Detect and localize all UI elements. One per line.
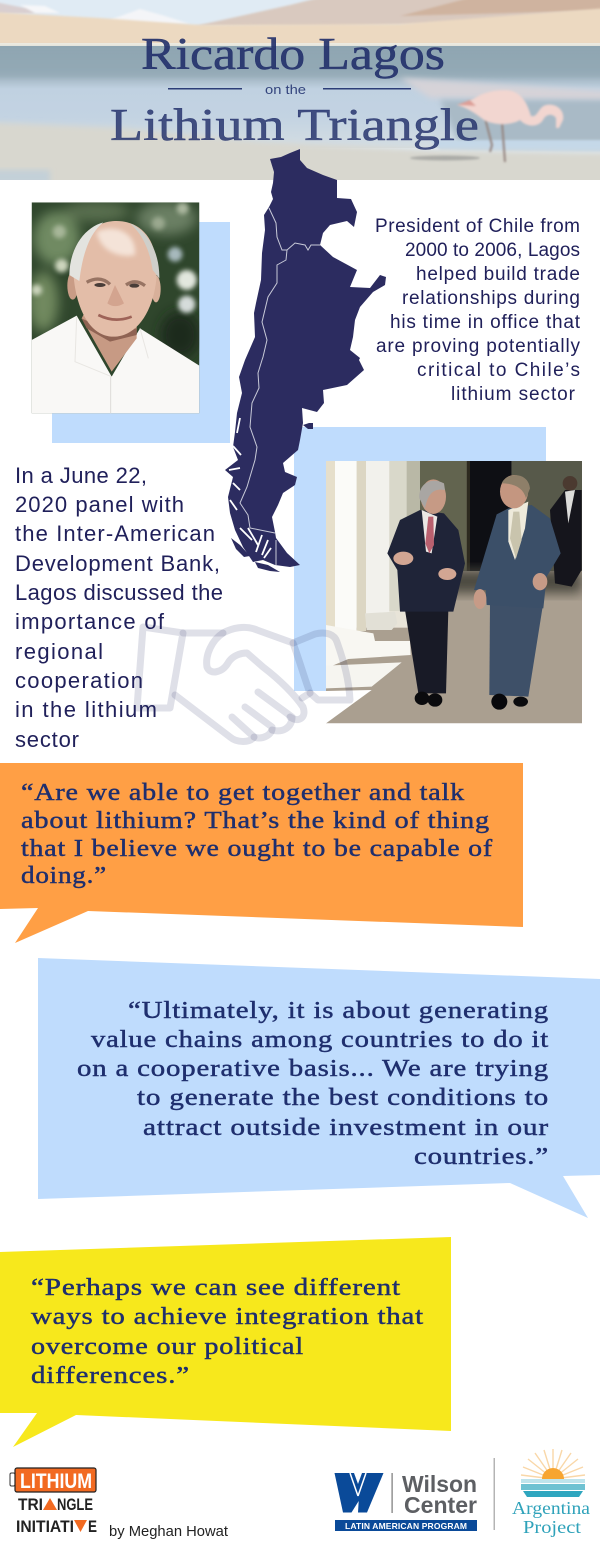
neck (82, 308, 137, 372)
text block: Lagos biography: his time in office that (390, 312, 581, 333)
foreground salt flat (0, 122, 600, 180)
text block: June 22 panel: 2020 panel with (15, 492, 184, 517)
callout: orange quote: that I believe we ought to be capable of (21, 835, 493, 862)
divider between logos (494, 1458, 495, 1530)
logo: Wilson Center: Center (404, 1492, 477, 1518)
logo: Lithium Triangle Initiative (10, 1468, 97, 1536)
callout: yellow quote: differences.” (31, 1362, 190, 1389)
callout: blue quote: value chains among countries to do it (91, 1026, 549, 1053)
callout: blue quote: “Ultimately, it is about generating (128, 997, 549, 1024)
callout: orange quote: doing.” (21, 862, 107, 889)
callout: yellow quote: overcome our political (31, 1333, 304, 1360)
distant snow mountains (0, 0, 600, 26)
logo: Lithium Triangle Initiative: INITIATI (16, 1517, 74, 1536)
text block: June 22 panel: Development Bank, (15, 551, 220, 576)
callout: blue quote: on a cooperative basis... We are trying (77, 1055, 549, 1082)
logo: Lithium Triangle Initiative: TRI (18, 1495, 43, 1514)
callout: blue quote: to generate the best conditions to (137, 1084, 549, 1111)
shirt (32, 316, 199, 413)
callout: blue quote: countries.” (414, 1143, 549, 1170)
background aide (550, 490, 582, 587)
Lagos (405, 610, 448, 693)
text block: June 22 panel: Lagos discussed the (15, 580, 223, 605)
icon: handshake watermark (137, 627, 350, 742)
lit floor patches (326, 625, 411, 668)
title: Lithium Triangle: Lithium Triangle (110, 100, 479, 150)
callout: blue quote: attract outside investment in our (143, 1114, 549, 1141)
text block: Lagos biography: lithium sector (451, 384, 576, 405)
text block: June 22 panel (15, 463, 223, 752)
fjords of southern Chile (229, 418, 271, 558)
water (0, 46, 600, 148)
Bush (489, 603, 543, 697)
text block: June 22 panel: In a June 22, (15, 463, 147, 488)
text block: Lagos biography: relationships during (402, 288, 580, 309)
text block: Lagos biography: 2000 to 2006, Lagos (405, 240, 580, 261)
text block: June 22 panel: cooperation (15, 668, 143, 693)
text block: June 22 panel: sector (15, 727, 79, 752)
southern islands (231, 538, 250, 557)
callout: orange quote (0, 763, 523, 943)
logo: Argentina Project: Argentina (512, 1498, 590, 1518)
logo: Argentina Project: Project (523, 1517, 581, 1537)
logo: Argentina Project (512, 1449, 590, 1537)
logo: Lithium Triangle Initiative: E (88, 1517, 97, 1536)
text block: June 22 panel: regional (15, 639, 103, 664)
header banner photo: salt lake with flamingo (0, 0, 600, 190)
text block: Lagos biography: are proving potentially (376, 336, 580, 357)
ears (67, 272, 78, 300)
text block: Lagos biography: helped build trade (416, 264, 580, 285)
callout: orange quote: about lithium? That’s the kind of thing (21, 807, 490, 834)
panel: blue backing for portrait (52, 222, 230, 443)
photo: Lagos and Bush walking (326, 461, 582, 723)
callout: orange quote: “Are we able to get together and talk (21, 779, 465, 806)
portrait photo of Ricardo Lagos (28, 202, 200, 413)
sand bank (0, 8, 600, 43)
hair (69, 222, 103, 281)
text block: June 22 panel: in the lithium (15, 697, 157, 722)
face features (87, 279, 145, 320)
head (73, 221, 157, 337)
callout: blue quote (38, 958, 600, 1218)
text block: June 22 panel: the Inter-American (15, 521, 215, 546)
map of Bolivia, Chile and Argentina (225, 149, 386, 572)
callout: yellow quote: “Perhaps we can see different (31, 1274, 401, 1301)
text block: Lagos biography: President of Chile from (375, 216, 580, 237)
title: Ricardo Lagos: Ricardo Lagos (141, 29, 445, 79)
text block: Lagos biography: critical to Chile’s (417, 360, 580, 381)
logo: Lithium Triangle Initiative: LITHIUM (20, 1470, 92, 1493)
logo: Wilson Center: Wilson (402, 1471, 477, 1497)
panel: blue backing for meeting photo (294, 427, 546, 691)
byline: by Meghan Howat (109, 1524, 228, 1540)
text block: June 22 panel: importance of (15, 609, 165, 634)
logo: Lithium Triangle Initiative: NGLE (57, 1495, 93, 1514)
logo: Wilson Center (334, 1471, 477, 1531)
flamingo (410, 90, 563, 162)
text block: Lagos biography (375, 216, 581, 405)
Valdes peninsula (303, 423, 313, 429)
callout: yellow quote: ways to achieve integration that (31, 1303, 424, 1330)
subtitle rule and on the: on the (265, 82, 306, 97)
country borders (240, 208, 320, 565)
logo: Wilson Center: LATIN AMERICAN PROGRAM (345, 1521, 467, 1531)
callout: yellow quote (0, 1237, 451, 1447)
